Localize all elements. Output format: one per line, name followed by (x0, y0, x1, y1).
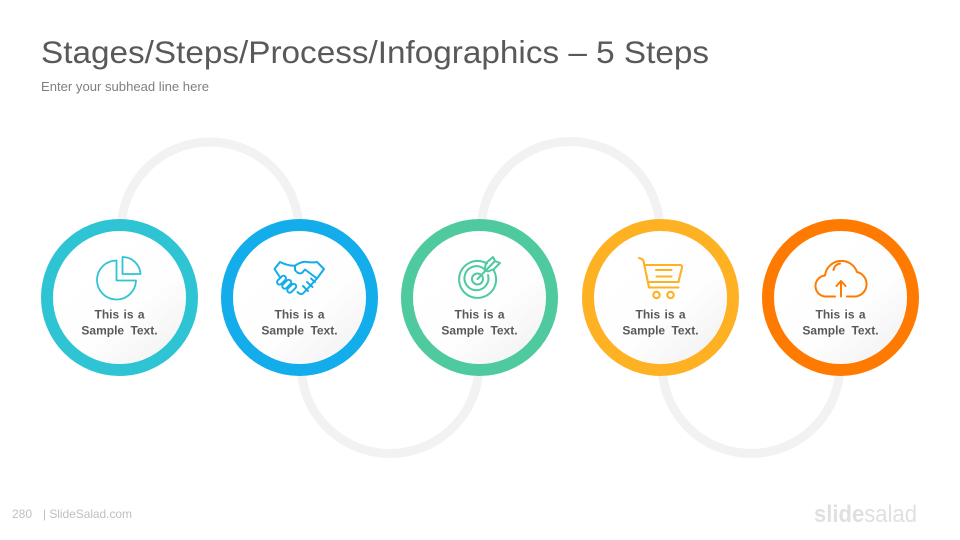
title: Stages/Steps/Process/Infographics – 5 Steps (41, 34, 709, 70)
icon: cloud upload (815, 261, 867, 297)
step 3 label: Sample Text. (441, 324, 518, 338)
icon: handshake (274, 262, 324, 294)
step 5 label (802, 308, 879, 338)
step 5 label: Sample Text. (802, 324, 879, 338)
step 3 (407, 225, 552, 370)
connector arcs (121, 142, 840, 453)
step 4 label: Sample Text. (622, 324, 699, 338)
step 4 label (622, 308, 699, 338)
step 2 (227, 225, 372, 370)
step 1 label (81, 308, 158, 338)
step 4 (588, 225, 733, 370)
step 1 label: This is a (94, 308, 145, 322)
step 4 label: This is a (635, 308, 686, 322)
step 1 (47, 225, 192, 370)
step 1 label: Sample Text. (81, 324, 158, 338)
step 5 (768, 225, 913, 370)
step 2 label: Sample Text. (261, 324, 338, 338)
footer: | SlideSalad.com (43, 507, 132, 521)
step 2 label: This is a (274, 308, 325, 322)
step 3 label (441, 308, 518, 338)
footer: 280 (12, 507, 32, 521)
icon: shopping cart (639, 258, 682, 298)
icon: pie chart (97, 257, 140, 300)
subhead: Enter your subhead line here (41, 80, 209, 94)
step 2 label (261, 308, 338, 338)
icon: target (459, 257, 500, 298)
step 5 label: This is a (815, 308, 866, 322)
step 3 label: This is a (454, 308, 505, 322)
logo: slidesalad (814, 501, 917, 528)
